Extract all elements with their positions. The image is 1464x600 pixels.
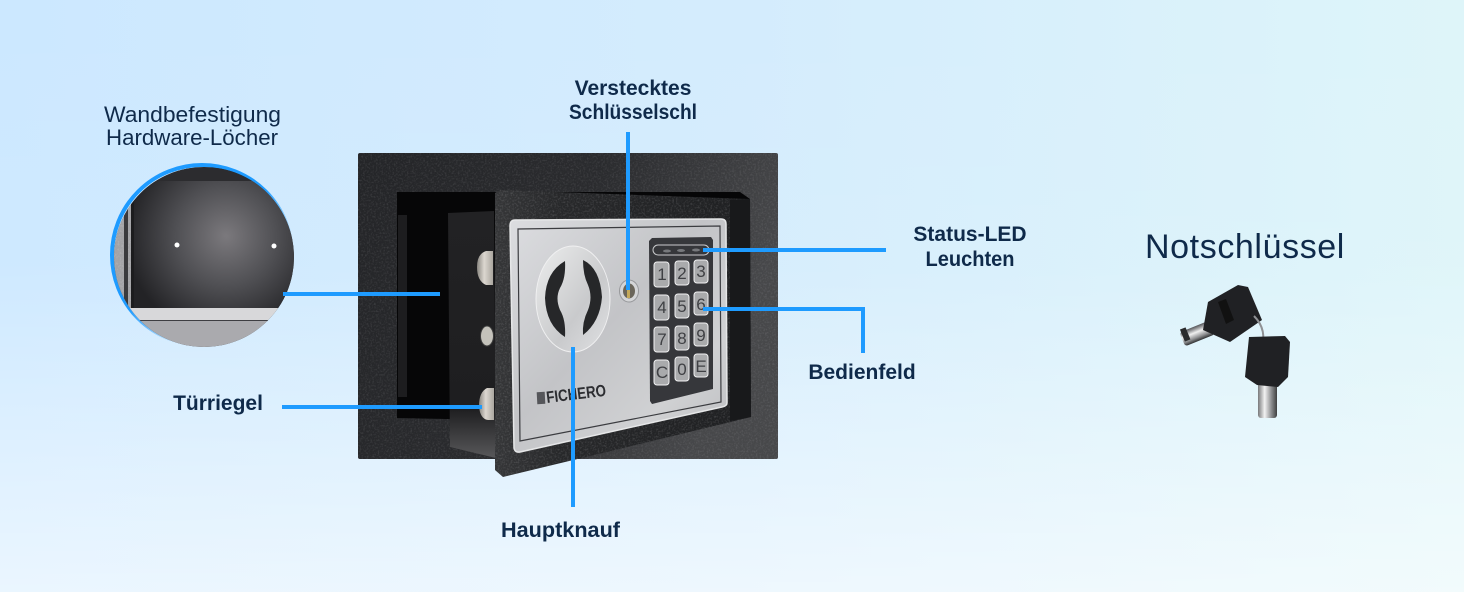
- label: hidden keyhole: Schlüsselschl: [569, 101, 697, 124]
- callout lines: [282, 132, 886, 507]
- keys: E: [695, 357, 707, 376]
- keys: 1: [657, 265, 667, 284]
- line: status LED: [703, 248, 886, 252]
- line: main knob: [571, 347, 575, 507]
- blue ring: [112, 165, 292, 345]
- keys: 7: [657, 330, 667, 349]
- LED strip: [653, 245, 709, 255]
- label: main knob: Hauptknauf: [501, 519, 621, 542]
- line: control panel: [703, 309, 863, 353]
- heading: emergency key: Notschlüssel: [1145, 228, 1345, 266]
- label: status LED: Status-LED: [913, 223, 1027, 246]
- brand: [537, 382, 607, 407]
- brand: FICHERO: [545, 382, 607, 407]
- inset: wall mounting holes: [110, 165, 304, 351]
- keys: 8: [677, 329, 687, 348]
- label: control panel: Bedienfeld: [808, 361, 916, 384]
- keypad: [649, 237, 713, 404]
- line: hidden keyhole: [626, 132, 630, 290]
- keys: 0: [677, 360, 687, 379]
- keys: 2: [677, 264, 687, 283]
- hole left: [174, 242, 180, 248]
- label: status LED: [913, 223, 1027, 271]
- main knob: [536, 246, 610, 352]
- heading: wall mounting: Wandbefestigung: [104, 102, 281, 127]
- heading: wall mounting: Hardware-Löcher: [106, 125, 278, 150]
- keys: [654, 260, 708, 385]
- line: door bolt: [282, 405, 482, 409]
- key lock: [620, 280, 638, 302]
- keys: 6: [696, 295, 706, 314]
- label: hidden keyhole: Verstecktes: [575, 77, 691, 100]
- door: [495, 190, 751, 477]
- door edge with bolts: [448, 211, 496, 458]
- safe photo: [358, 153, 778, 477]
- key ring: [1254, 316, 1263, 350]
- top bolt: [477, 251, 493, 285]
- middle screw: [480, 326, 494, 346]
- label: status LED: Leuchten: [926, 248, 1014, 271]
- key one: [1180, 285, 1262, 346]
- line: wall mount: [283, 292, 440, 296]
- heading: wall mounting: [104, 102, 281, 150]
- keys: 5: [677, 297, 687, 316]
- inner side wall strip: [398, 215, 407, 397]
- bottom bolt: [479, 388, 494, 420]
- circular photo: [114, 167, 294, 347]
- keys: 3: [696, 262, 706, 281]
- key two: [1245, 336, 1290, 418]
- safe front frame: [358, 153, 778, 459]
- icon: emergency keys: [1180, 285, 1290, 418]
- keys: 4: [657, 298, 667, 317]
- safe opening: [397, 192, 750, 420]
- label: hidden keyhole: [569, 77, 697, 124]
- hole right: [272, 244, 276, 248]
- label: door bolt: Türriegel: [173, 392, 263, 415]
- keys: C: [656, 363, 668, 382]
- control plate: [510, 219, 727, 452]
- keys: 9: [696, 326, 706, 345]
